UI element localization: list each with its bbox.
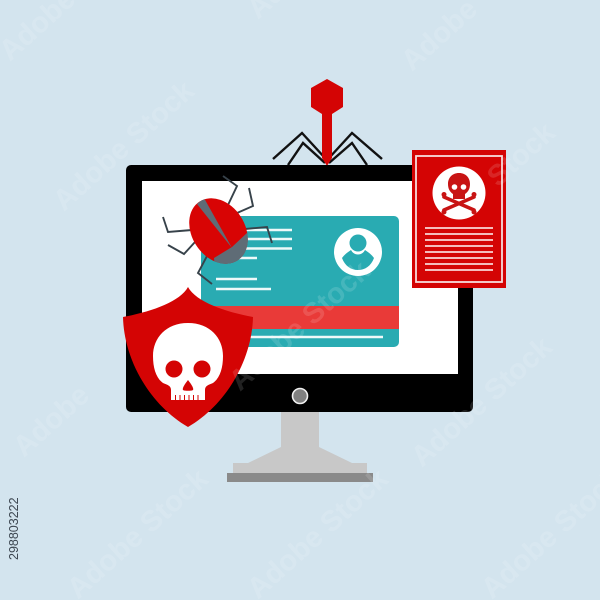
power button: [292, 388, 308, 404]
bug body: [177, 187, 260, 275]
stock watermarks: Adobe Stock: [223, 254, 377, 397]
monitor: [126, 165, 473, 412]
poster skull badge: [432, 166, 486, 220]
stock watermarks: Adobe Stock: [405, 330, 559, 473]
stock watermarks: Adobe Stock: [47, 74, 201, 217]
warning poster: [412, 150, 506, 288]
shield with skull: [123, 287, 253, 427]
stock id: 298803222: [7, 497, 21, 560]
card text lines: [216, 230, 383, 337]
id card: [201, 216, 399, 347]
stock watermarks: Adobe: [7, 379, 96, 463]
avatar: [334, 228, 382, 276]
card stripe: [201, 306, 399, 329]
virus: bacteriophage: [273, 79, 382, 166]
monitor stand: [227, 411, 373, 482]
poster text lines: [425, 228, 493, 270]
bug legs: [163, 176, 272, 284]
shield skull: [153, 323, 223, 400]
stock watermarks: Stock: [481, 116, 562, 193]
bug: [163, 176, 272, 284]
